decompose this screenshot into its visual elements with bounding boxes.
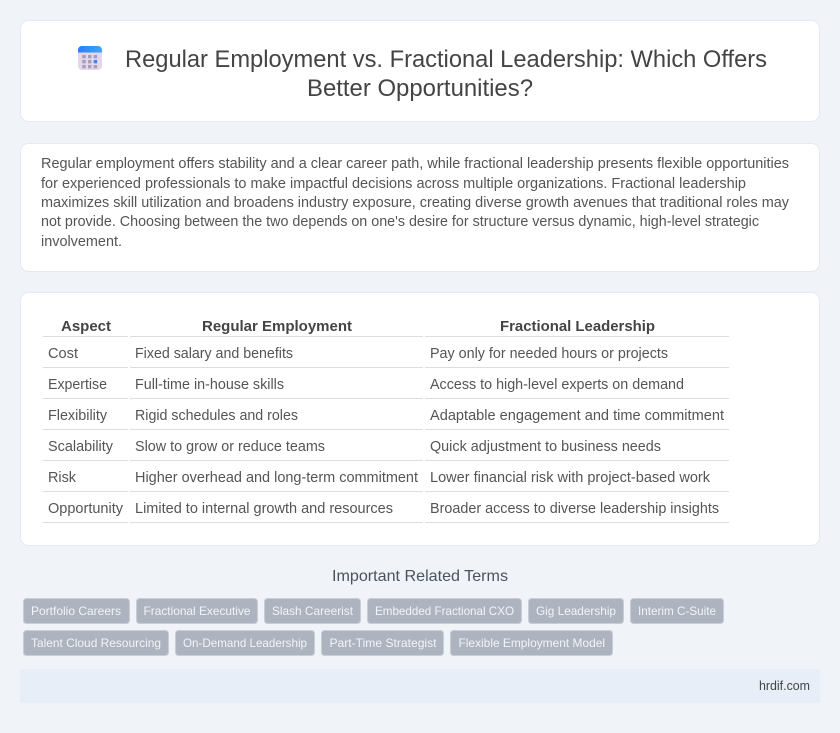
panel: summary text: [20, 144, 820, 272]
table row: expertise: [48, 377, 684, 393]
table row: opportunity: Limited to internal growth and resources: [135, 501, 393, 517]
table row: risk: Higher overhead and long-term commitment: [135, 470, 418, 486]
icon: calendar: [78, 46, 102, 70]
text block: summary paragraph: for experienced professionals to make impactful decisions across multiple organizations. Fractional leadership: [41, 176, 746, 192]
tag list: related terms: Slash Careerist: [272, 604, 354, 618]
tag list: related terms: Flexible Employment Model: [458, 636, 605, 650]
text block: summary paragraph: involvement.: [41, 234, 122, 250]
table row: opportunity: [48, 501, 719, 517]
table row: scalability: Scalability: [48, 439, 114, 455]
table row: flexibility: Rigid schedules and roles: [135, 408, 298, 424]
title: Better Opportunities?: [307, 75, 533, 102]
text block: summary paragraph: maximizes skill utilization and broadens industry exposure, creating diverse growth avenues that traditional roles may: [41, 195, 790, 211]
heading: important related terms: Important Related Terms: [332, 568, 508, 585]
table row: risk: Lower financial risk with project-based work: [430, 470, 711, 486]
table header: Aspect: [61, 318, 111, 335]
table row: risk: [48, 470, 711, 486]
tag list: related terms: Part-Time Strategist: [330, 636, 437, 650]
table row: opportunity: Broader access to diverse leadership insights: [430, 501, 719, 517]
table row: flexibility: [48, 408, 724, 424]
table header: Fractional Leadership: [500, 318, 655, 335]
tag list: related terms: Embedded Fractional CXO: [375, 604, 514, 618]
table row: opportunity: Opportunity: [48, 501, 124, 517]
table row: cost: Pay only for needed hours or projects: [430, 346, 668, 362]
table row: expertise: Full-time in-house skills: [135, 377, 284, 393]
tag list: related terms: Talent Cloud Resourcing: [31, 636, 161, 650]
tag list: related terms: On-Demand Leadership: [183, 636, 307, 650]
table row: scalability: Quick adjustment to business needs: [430, 439, 661, 455]
text block: summary paragraph: not provide. Choosing between the two depends on one's desire for structure versus dynamic, high-level strategic: [41, 214, 759, 230]
table header: [61, 318, 655, 335]
table row: cost: Cost: [48, 346, 78, 362]
table row: scalability: Slow to grow or reduce teams: [135, 439, 325, 455]
title: [125, 46, 767, 102]
table row: risk: Risk: [48, 470, 77, 486]
table row: cost: Fixed salary and benefits: [135, 346, 293, 362]
panel: comparison table: [20, 292, 820, 546]
tag list: related terms: Fractional Executive: [144, 604, 251, 618]
tag list: related terms: Interim C-Suite: [638, 604, 716, 618]
text block: summary paragraph: [41, 156, 790, 250]
table row: expertise: Access to high-level experts on demand: [430, 377, 684, 393]
title: Regular Employment vs. Fractional Leadership: Which Offers: [125, 46, 767, 73]
tag list: related terms: [24, 598, 724, 656]
table header: Regular Employment: [202, 318, 352, 335]
table row: expertise: Expertise: [48, 377, 107, 393]
table row: flexibility: Adaptable engagement and time commitment: [430, 408, 724, 424]
tag list: related terms: Portfolio Careers: [31, 604, 121, 618]
text block: summary paragraph: Regular employment offers stability and a clear career path, while fractional leadership presents flexible opportunities: [41, 156, 789, 172]
table row: flexibility: Flexibility: [48, 408, 108, 424]
table row: scalability: [48, 439, 661, 455]
tag list: related terms: Gig Leadership: [536, 604, 616, 618]
footer: hrdif.com: [759, 678, 810, 693]
table row: cost: [48, 346, 668, 362]
footer: [20, 669, 820, 703]
panel: title card: [20, 20, 820, 122]
